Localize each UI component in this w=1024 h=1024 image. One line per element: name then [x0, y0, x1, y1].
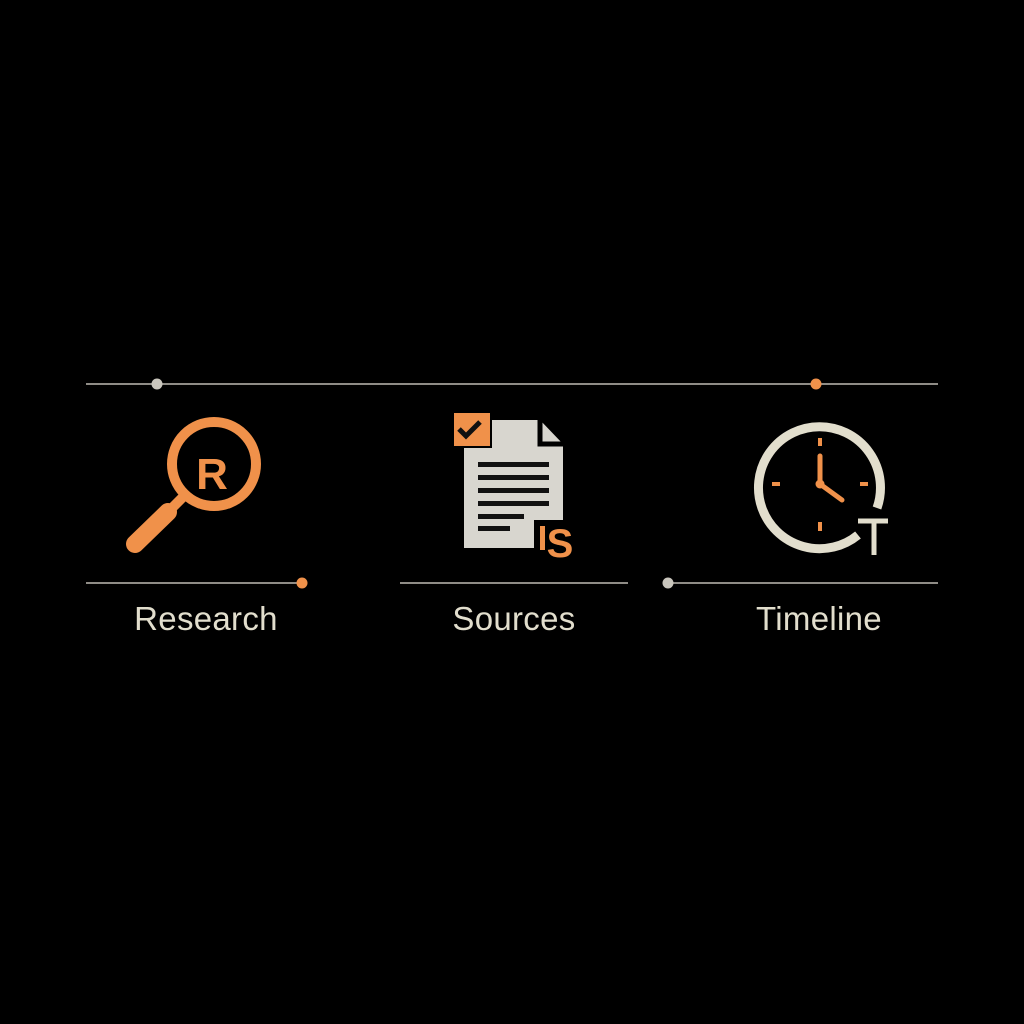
label: Research: Research: [134, 600, 278, 637]
icon: clock with T: [758, 427, 888, 555]
bottom line: timeline: [662, 578, 938, 588]
label: Sources: Sources: [452, 600, 576, 637]
bottom line: research: [86, 578, 308, 588]
bottom line: sources: [400, 582, 628, 584]
icon: document with checkbox and S: [452, 411, 580, 566]
icon: magnifier with R: [135, 422, 256, 544]
icon: magnifier with R: R: [196, 450, 228, 499]
top timeline line: [86, 378, 938, 390]
icon: document with checkbox and S: S: [547, 522, 573, 566]
label: Timeline: Timeline: [756, 600, 882, 637]
